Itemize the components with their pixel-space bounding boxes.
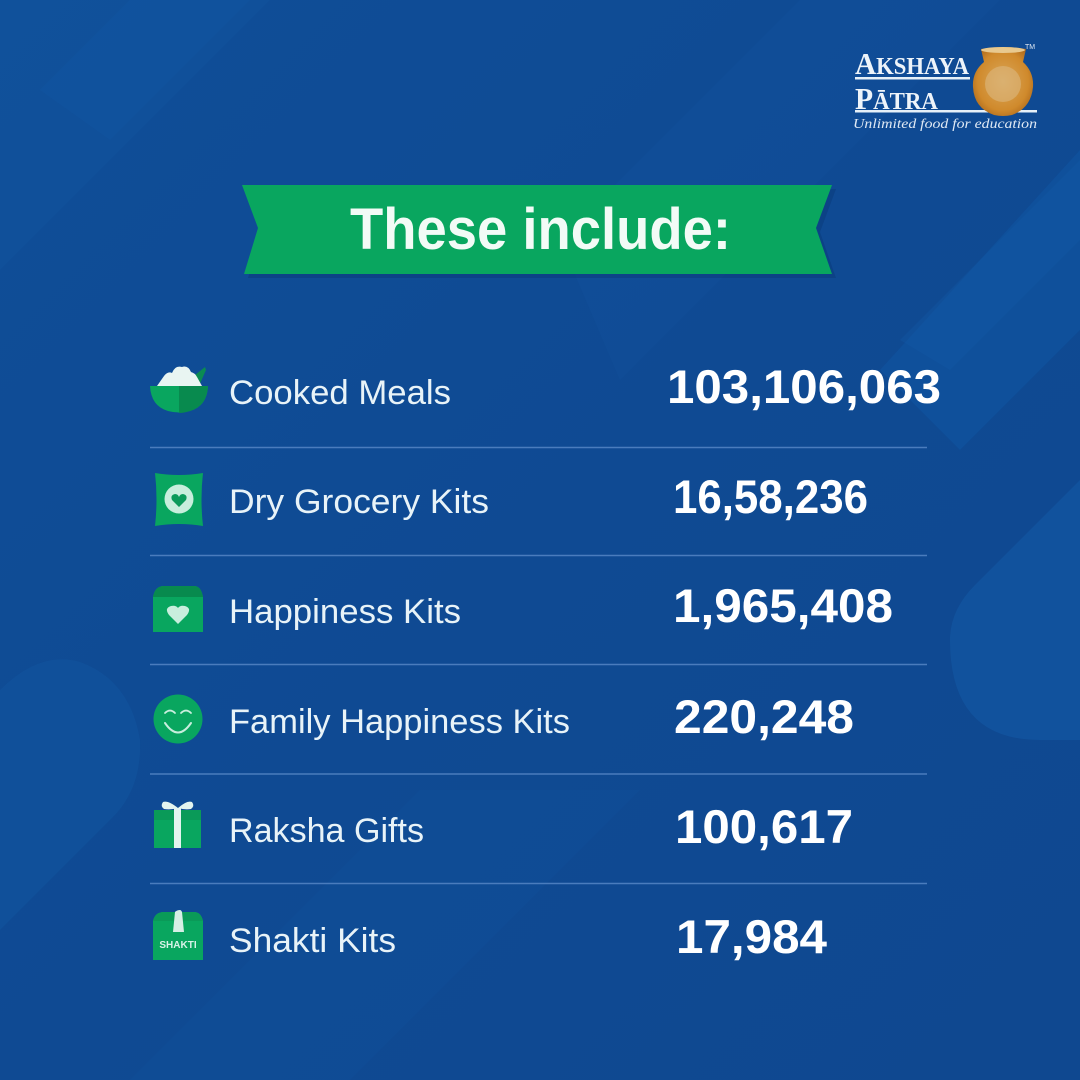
icon: grocery sack: [155, 473, 203, 526]
value: 1,965,408: [673, 579, 893, 632]
value: 103,106,063: [667, 360, 941, 413]
logo wordmark: AKSHAYA: [855, 46, 970, 81]
label: Raksha Gifts: [229, 812, 424, 850]
icon: shakti box: [153, 910, 203, 960]
row: Happiness Kits: [153, 579, 893, 632]
label: Cooked Meals: [229, 374, 451, 412]
icon: gift: [154, 802, 201, 848]
logo wordmark: [855, 46, 970, 116]
value: 220,248: [674, 690, 854, 743]
icon: shakti box: SHAKTI: [159, 940, 197, 951]
logo: Akshaya Patra: TM: [1025, 44, 1035, 51]
row: Cooked Meals: [150, 360, 941, 413]
icon: smiley: [154, 694, 202, 744]
heading ribbon: [242, 185, 836, 278]
value: 17,984: [676, 910, 827, 963]
value: 16,58,236: [673, 470, 868, 523]
label: Family Happiness Kits: [229, 703, 570, 741]
row dividers: [150, 448, 927, 884]
row: Shakti Kits: [153, 910, 827, 963]
row: Raksha Gifts: [154, 800, 853, 853]
logo: Akshaya Patra: Unlimited food for education: [853, 117, 1037, 132]
row: Dry Grocery Kits: [155, 470, 868, 526]
logo: Akshaya Patra: [853, 44, 1037, 132]
row: Family Happiness Kits: [154, 690, 854, 744]
label: Happiness Kits: [229, 593, 461, 631]
label: Dry Grocery Kits: [229, 483, 489, 521]
logo pot: [973, 47, 1033, 116]
value: 100,617: [675, 800, 853, 853]
icon: heart box: [153, 586, 203, 632]
logo wordmark: PĀTRA: [855, 81, 939, 116]
label: Shakti Kits: [229, 922, 396, 960]
heading text: These include:: [350, 197, 731, 262]
icon: rice bowl: [150, 367, 208, 413]
